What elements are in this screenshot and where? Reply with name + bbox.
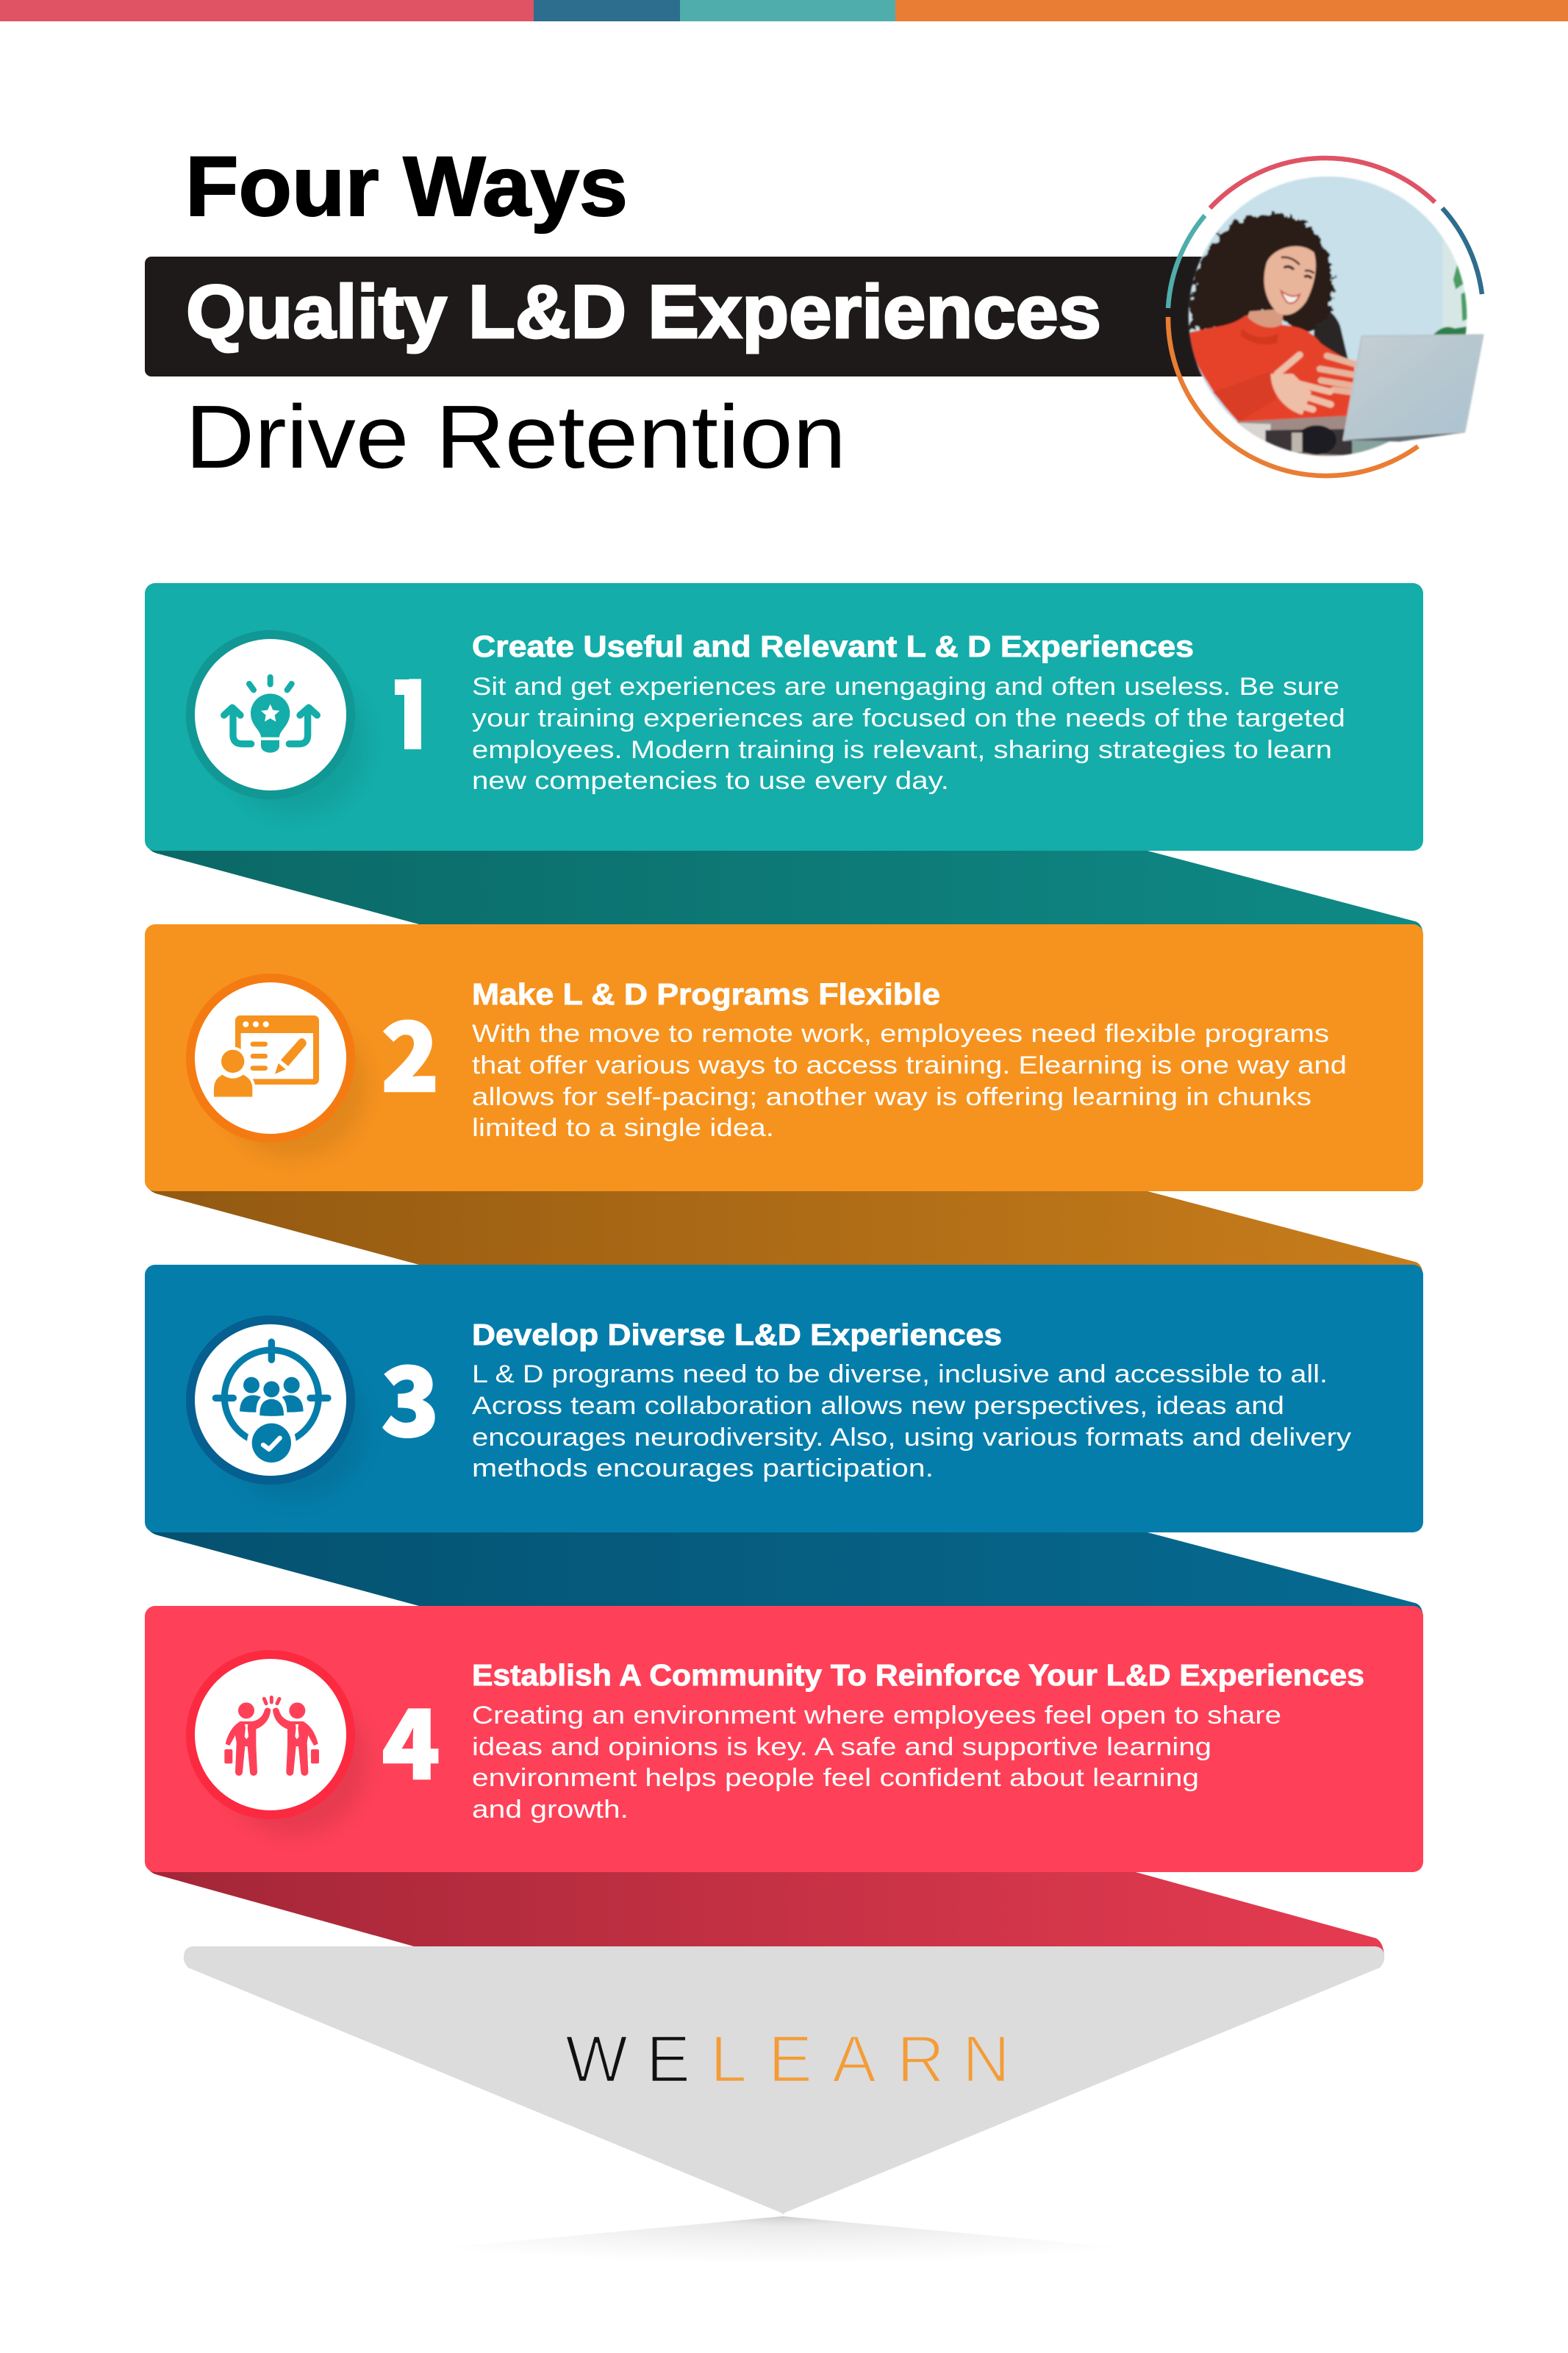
hair <box>1190 214 1333 333</box>
logo: WELEARN: W <box>565 2023 628 2096</box>
number 1: 1 <box>382 639 441 777</box>
title line: Quality L&D Experiences: Quality L&D Experiences <box>186 270 1101 354</box>
body text 1: employees. Modern training is relevant, sharing strategies to learn <box>472 736 1332 764</box>
heading 3: Develop Diverse L&D Experiences <box>472 1318 1002 1352</box>
header title <box>145 140 1211 487</box>
right hand fingers <box>1320 356 1355 392</box>
chair <box>1313 310 1349 360</box>
panel 2: flexible programs <box>145 924 1423 1191</box>
logo: WELEARN: E <box>768 2023 812 2096</box>
face <box>1264 246 1316 315</box>
ribbon: fold 4 <box>145 1856 1384 1960</box>
body text 1: your training experiences are focused on the needs of the targeted <box>472 704 1345 732</box>
grey arrowhead <box>184 1946 1384 2214</box>
icon 1: light bulb with arrows <box>186 630 368 816</box>
icon 4: two people high-fiving <box>186 1650 368 1836</box>
logo: WELEARN: N <box>962 2023 1010 2096</box>
body text 2 <box>472 1020 1347 1142</box>
body text 3: L & D programs need to be diverse, inclusive and accessible to all. <box>472 1360 1328 1388</box>
number 3: 3 <box>381 1326 440 1464</box>
body text 4 <box>472 1702 1281 1824</box>
ribbon: fold 3 <box>145 1516 1423 1619</box>
ring arcs <box>1168 158 1482 476</box>
heading 1: Create Useful and Relevant L & D Experiences <box>472 629 1194 663</box>
number 4: 4 <box>382 1668 440 1807</box>
ribbon: fold 1 <box>145 835 1423 938</box>
number 2: 2 <box>381 981 440 1119</box>
body text 1: new competencies to use every day. <box>472 767 949 795</box>
heading 4: Establish A Community To Reinforce Your L&D Experiences <box>472 1658 1364 1692</box>
title line: Drive Retention: Drive Retention <box>185 387 846 487</box>
body text 4: Creating an environment where employees feel open to share <box>472 1702 1281 1729</box>
sweater <box>1190 315 1355 423</box>
title line: Four Ways: Four Ways <box>185 140 628 234</box>
left hand <box>1271 374 1311 415</box>
heading 2: Make L & D Programs Flexible <box>472 977 940 1011</box>
body text 3: encourages neurodiversity. Also, using various formats and delivery <box>472 1424 1352 1452</box>
body text 3: methods encourages participation. <box>472 1454 934 1482</box>
icon 3: team in target with check <box>186 1315 368 1502</box>
body text 1 <box>472 673 1345 795</box>
title bar: black band <box>145 257 1211 376</box>
logo: WELEARN: R <box>897 2023 945 2096</box>
photo scene <box>1181 169 1483 463</box>
body text 3: Across team collaboration allows new perspectives, ideas and <box>472 1392 1284 1420</box>
body text 2: With the move to remote work, employees need flexible programs <box>472 1020 1329 1048</box>
body text 2: that offer various ways to access training. Elearning is one way and <box>472 1051 1347 1079</box>
body text 1: Sit and get experiences are unengaging and often useless. Be sure <box>472 673 1339 701</box>
photo: woman at laptop with coloured ring <box>1168 158 1483 476</box>
logo: WELEARN: A <box>832 2023 876 2096</box>
top colour bar <box>0 0 1568 21</box>
body text 2: allows for self-pacing; another way is offering learning in chunks <box>472 1083 1311 1111</box>
ribbon: fold 2 <box>145 1175 1423 1278</box>
panel 4: community <box>145 1606 1423 1872</box>
neck <box>1245 309 1284 331</box>
panel 1: useful and relevant <box>145 583 1423 851</box>
logo: WELEARN: E <box>646 2023 690 2096</box>
body text 2: limited to a single idea. <box>472 1114 774 1142</box>
body text 4: and growth. <box>472 1796 629 1824</box>
number 1 <box>395 679 421 749</box>
laptop <box>1344 335 1483 440</box>
arrowhead shadow <box>323 2216 1242 2264</box>
body text 4: environment helps people feel confident about learning <box>472 1764 1199 1792</box>
body text 4: ideas and opinions is key. A safe and supportive learning <box>472 1733 1211 1761</box>
table and camera <box>1236 415 1353 457</box>
logo: WELEARN: L <box>710 2023 747 2096</box>
body text 3 <box>472 1360 1352 1482</box>
icon 2: window, person and pencil <box>186 974 368 1160</box>
panel 3: diverse experiences <box>145 1265 1423 1532</box>
